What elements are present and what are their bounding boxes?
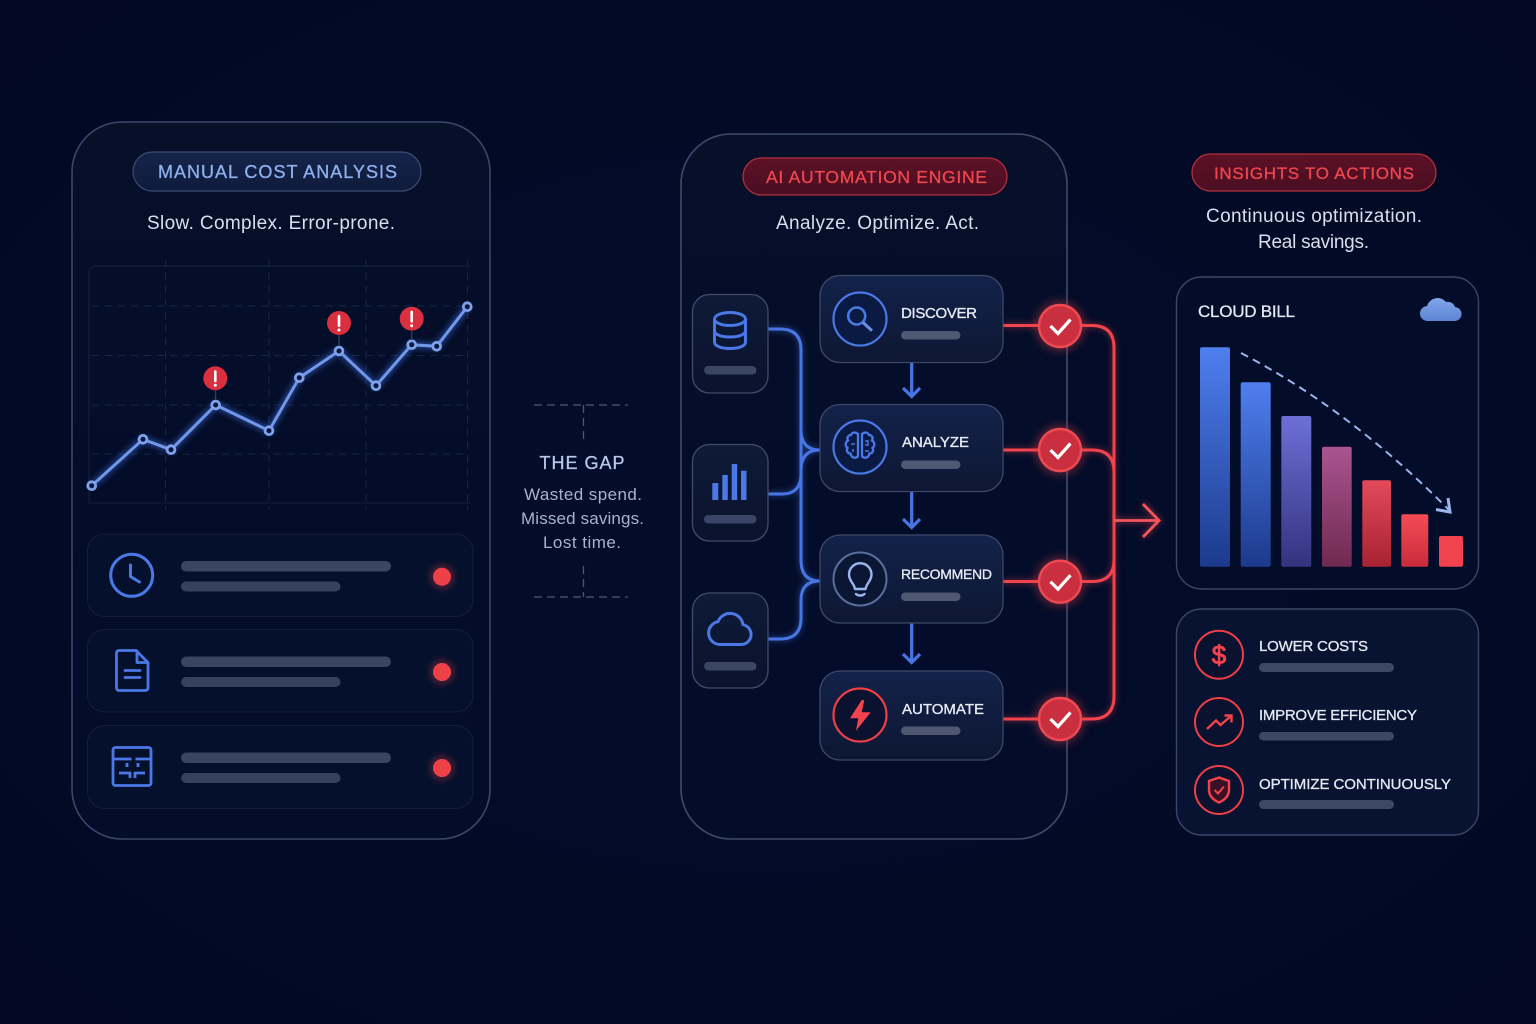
check badge: discover [1036,302,1084,350]
red connectors: steps to trunk [1003,326,1114,719]
row: clock [88,534,473,616]
icon: brain [834,420,886,474]
check badge: analyze [1036,426,1084,474]
icon: lightning bolt [834,688,886,742]
row: calculator table [88,726,473,808]
heading pill: insights to actions: INSIGHTS TO ACTIONS [1214,164,1414,183]
benefit: improve efficiency: IMPROVE EFFICIENCY [1259,707,1417,724]
icon: table [113,748,151,786]
label: cloud bill: CLOUD BILL [1198,302,1295,321]
subtitle: analyze optimize act: Analyze. Optimize. Act. [776,213,979,234]
heading pill: ai automation engine [743,158,1007,195]
connectors: sources to steps [768,329,820,639]
arrows between steps [903,363,920,662]
subtitle: continuous optimization real savings: Real savings. [1258,232,1369,253]
heading pill: manual cost analysis [133,152,421,191]
benefit: lower costs [1195,631,1394,679]
icon: cloud [709,613,751,644]
icon: trend up [1195,698,1243,746]
icon: clock [111,554,153,596]
icon: dollar: $ [1212,640,1227,670]
benefit: optimize continuously: OPTIMIZE CONTINUOUSLY [1259,776,1451,793]
panel: manual cost analysis [72,122,490,839]
line chart with alerts [88,260,471,510]
subtitle: continuous optimization real savings: Continuous optimization. [1206,206,1422,227]
check badge: recommend [1036,558,1084,606]
step: analyze [820,404,1003,492]
icon: database [714,312,746,348]
the gap callout: Wasted spend. [524,485,642,504]
step: analyze: ANALYZE [902,434,969,451]
icon: magnifier [834,292,886,346]
section: insights to actions heading [1192,154,1436,253]
the gap callout: Lost time. [543,533,621,552]
icon: dollar [1195,631,1243,679]
alert markers [203,307,424,390]
source card: database [692,294,768,393]
the gap callout: Missed savings. [521,509,644,528]
icon: shield check [1195,766,1243,814]
the gap callout [521,405,644,597]
step: discover [820,276,1003,362]
arrow: dashed downward trend [1241,353,1450,512]
heading pill: manual cost analysis: MANUAL COST ANALYSIS [158,162,397,182]
icon: bar chart [712,464,746,500]
icon: filled cloud [1420,298,1462,321]
source card: chart [692,444,768,541]
the gap callout: THE GAP [540,453,624,473]
subtitle: continuous optimization real savings [1206,206,1422,253]
output arrow [1114,504,1159,537]
source card: cloud [692,593,768,688]
icon: document [116,650,148,690]
panel: benefits [1176,609,1478,835]
subtitle: slow complex error-prone: Slow. Complex. Error-prone. [147,213,395,234]
step: recommend: RECOMMEND [901,566,992,582]
step: automate: AUTOMATE [902,701,984,718]
step: recommend [820,535,1003,623]
panel: cloud bill chart [1176,277,1478,589]
bar chart: declining bill [1200,347,1463,567]
row: document [88,630,473,712]
check badge: automate [1036,695,1084,743]
icon: light bulb [834,552,886,606]
heading pill: insights to actions [1192,154,1436,191]
benefit: lower costs: LOWER COSTS [1259,638,1368,655]
heading pill: ai automation engine: AI AUTOMATION ENGINE [766,167,987,187]
panel: ai automation engine [681,134,1067,839]
step: discover: DISCOVER [901,305,977,322]
benefit: optimize continuously [1195,766,1451,814]
step: automate [820,671,1003,760]
benefit: improve efficiency [1195,698,1417,746]
